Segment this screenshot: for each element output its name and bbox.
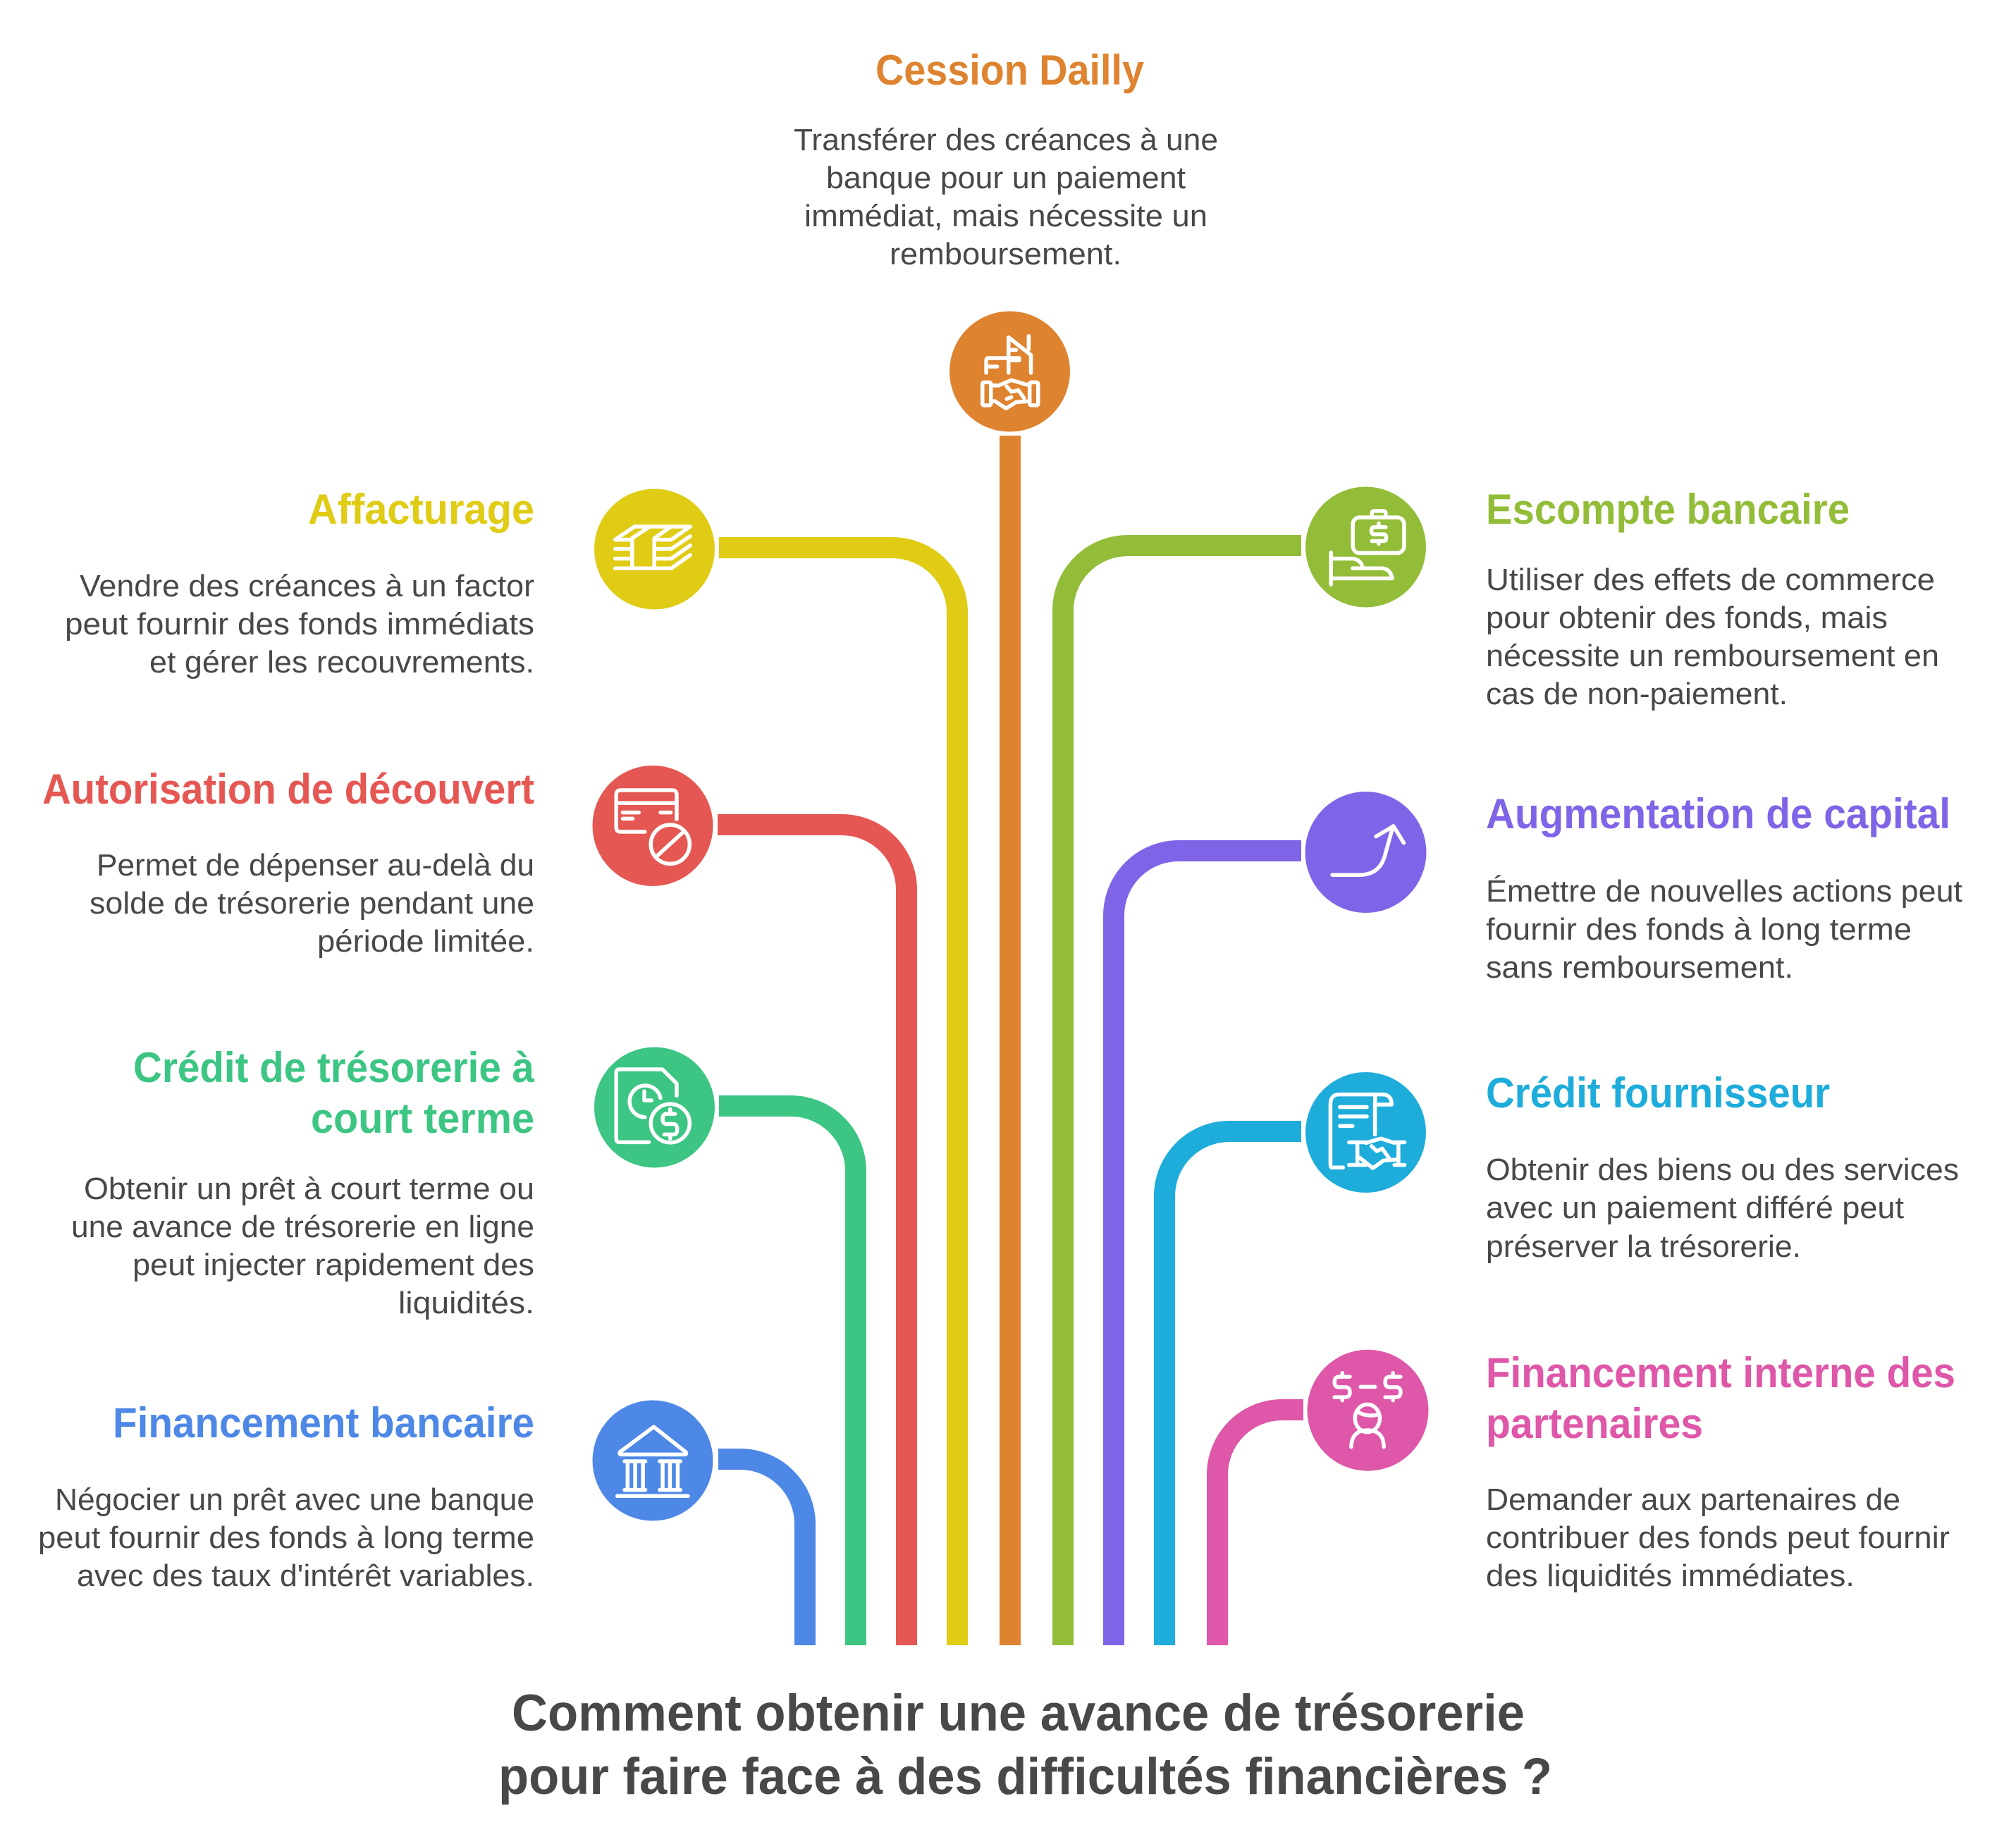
heading: Autorisation de découvert: Autorisation de découvert	[42, 766, 534, 813]
text block: Affacturage description: et gérer les recouvrements.	[149, 645, 534, 680]
heading: Financement interne des partenaires	[1486, 1349, 1955, 1447]
icon: Financement interne person and money	[1307, 1350, 1428, 1471]
connector lines	[718, 436, 1303, 1645]
text block: Financement interne description: des liquidités immédiates.	[1486, 1559, 1855, 1593]
text block: Financement bancaire description: Négocier un prêt avec une banque	[55, 1482, 534, 1517]
text block: Cession Dailly description	[794, 123, 1218, 271]
text block: Crédit de trésorerie description: une avance de trésorerie en ligne	[71, 1210, 534, 1244]
text block: Affacturage description: Vendre des créances à un factor	[80, 569, 534, 603]
title: Comment obtenir une avance de trésorerie	[512, 1685, 1525, 1742]
heading: Financement interne des partenaires: Financement interne des	[1486, 1349, 1955, 1396]
title: pour faire face à des difficultés financières ?	[498, 1748, 1552, 1805]
text block: Autorisation description: solde de trésorerie pendant une	[90, 886, 534, 921]
heading: Cession Dailly: Cession Dailly	[875, 47, 1145, 94]
heading: Crédit de trésorerie à court terme: court terme	[311, 1095, 534, 1142]
text block: Financement interne description	[1486, 1482, 1950, 1593]
text block: Autorisation description: période limitée.	[317, 924, 534, 959]
text block: Autorisation description: Permet de dépenser au-delà du	[97, 848, 534, 883]
text block: Financement bancaire description: peut fournir des fonds à long terme	[38, 1520, 534, 1555]
text block: Cession Dailly description: banque pour un paiement	[826, 161, 1186, 195]
text block: Financement bancaire description: avec des taux d'intérêt variables.	[77, 1559, 534, 1593]
panel: Escompte bancaire	[1486, 486, 1939, 711]
text block: Escompte bancaire description: nécessite un remboursement en	[1486, 639, 1939, 673]
text block: Cession Dailly description: immédiat, mais nécessite un	[804, 199, 1207, 233]
icon: Financement bancaire bank building	[592, 1400, 713, 1521]
panel: Financement bancaire	[38, 1399, 534, 1593]
text block: Autorisation description	[90, 848, 534, 959]
text block: Escompte bancaire description: Utiliser des effets de commerce	[1486, 563, 1935, 597]
icon: Crédit de trésorerie document, clock and coin	[594, 1047, 715, 1167]
panel: Crédit fournisseur	[1486, 1069, 1959, 1264]
text block: Crédit de trésorerie description	[71, 1172, 534, 1320]
text block: Cession Dailly description: remboursement.	[890, 237, 1121, 271]
text block: Augmentation description: sans remboursement.	[1486, 950, 1793, 985]
text block: Cession Dailly description: Transférer des créances à une	[794, 123, 1218, 157]
icon: Autorisation de découvert blocked card	[592, 766, 713, 886]
text block: Crédit de trésorerie description: Obtenir un prêt à court terme ou	[84, 1172, 534, 1206]
heading: Escompte bancaire: Escompte bancaire	[1486, 486, 1850, 533]
icon: Escompte bancaire hand and briefcase	[1305, 486, 1426, 608]
text block: Augmentation description: fournir des fonds à long terme	[1486, 912, 1912, 947]
panel: Affacturage	[65, 486, 534, 680]
heading: Affacturage: Affacturage	[308, 486, 534, 533]
panel: Augmentation de capital	[1486, 790, 1962, 985]
heading: Crédit fournisseur: Crédit fournisseur	[1486, 1069, 1830, 1117]
text block: Crédit fournisseur description: préserver la trésorerie.	[1486, 1229, 1801, 1264]
icon: Affacturage banknotes	[594, 489, 715, 609]
icon: Cession Dailly buildings and handshake	[949, 312, 1070, 431]
text block: Crédit fournisseur description	[1486, 1153, 1959, 1264]
icon: Crédit fournisseur contract and handshake	[1305, 1072, 1426, 1193]
text block: Affacturage description	[65, 569, 534, 680]
text block: Financement interne description: contribuer des fonds peut fournir	[1486, 1520, 1950, 1555]
heading: Crédit de trésorerie à court terme: Crédit de trésorerie à	[133, 1044, 535, 1091]
text block: Financement bancaire description	[38, 1482, 534, 1593]
text block: Financement interne description: Demander aux partenaires de	[1486, 1482, 1900, 1517]
text block: Escompte bancaire description	[1486, 563, 1939, 711]
heading: Financement bancaire: Financement bancaire	[113, 1399, 534, 1446]
panel: Autorisation de découvert	[42, 766, 534, 959]
panel: Crédit de trésorerie à court terme	[71, 1044, 535, 1320]
text block: Affacturage description: peut fournir des fonds immédiats	[65, 607, 534, 641]
text block: Crédit de trésorerie description: peut injecter rapidement des	[133, 1248, 534, 1282]
heading: Augmentation de capital: Augmentation de capital	[1486, 790, 1950, 837]
text block: Augmentation description	[1486, 874, 1962, 985]
text block: Crédit fournisseur description: avec un paiement différé peut	[1486, 1191, 1904, 1225]
heading: Financement interne des partenaires: partenaires	[1486, 1400, 1703, 1447]
text block: Augmentation description: Émettre de nouvelles actions peut	[1486, 874, 1962, 909]
title	[498, 1685, 1552, 1805]
panel: Financement interne des partenaires	[1486, 1349, 1955, 1593]
text block: Crédit fournisseur description: Obtenir des biens ou des services	[1486, 1153, 1959, 1187]
heading: Crédit de trésorerie à court terme	[133, 1044, 535, 1142]
panel: Cession Dailly	[794, 47, 1218, 271]
icon: Augmentation de capital rising arrow	[1305, 792, 1427, 913]
text block: Escompte bancaire description: cas de non-paiement.	[1486, 677, 1788, 711]
text block: Crédit de trésorerie description: liquidités.	[398, 1286, 534, 1320]
text block: Escompte bancaire description: pour obtenir des fonds, mais	[1486, 601, 1888, 635]
